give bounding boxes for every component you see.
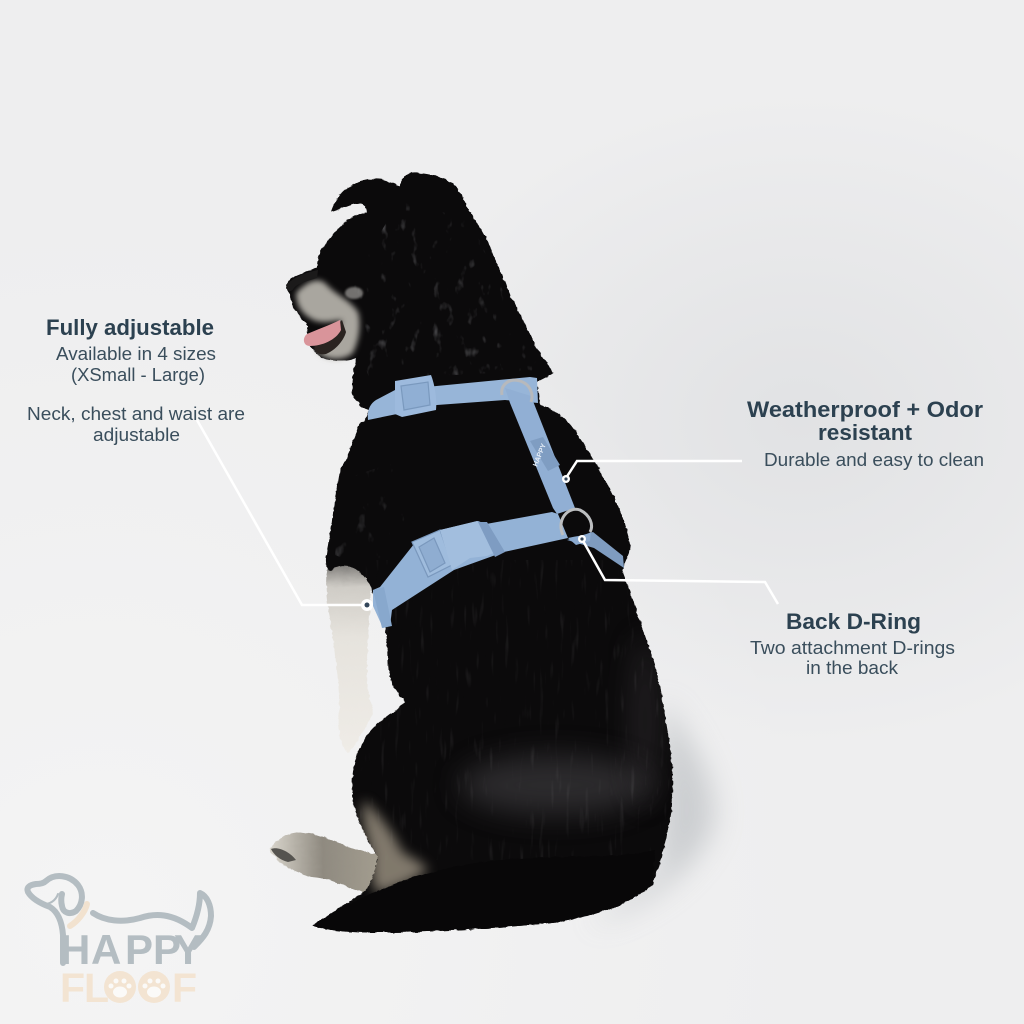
cheek white patch: [345, 287, 363, 299]
logo paw 2: [138, 971, 170, 1003]
logo FLOOF wordmark: FLOOF: [60, 965, 197, 1011]
dog silhouette: [287, 173, 673, 933]
plastic buckle: [440, 521, 500, 570]
extended paw and leg: [270, 832, 420, 893]
logo dog outline: [27, 876, 211, 963]
text: back d-ring: Two attachment D-rings: [750, 638, 955, 658]
callout line: fully adjustable: [197, 420, 373, 611]
text: weatherproof: resistant: [818, 420, 913, 445]
paw pads: [271, 848, 296, 862]
label text: HAPPY: [532, 442, 548, 468]
callout line: back d-ring: [578, 535, 778, 604]
back strap: [505, 388, 575, 514]
muzzle: [296, 280, 360, 359]
logo: happy floof: [27, 876, 211, 1011]
callout line: weatherproof: [562, 461, 742, 483]
tail: [313, 850, 655, 933]
strap end: [373, 587, 392, 628]
harness: [368, 375, 624, 628]
text: fully adjustable: (XSmall - Large): [71, 365, 205, 385]
text: fully adjustable: [27, 315, 245, 445]
text: back d-ring: Back D-Ring: [786, 609, 921, 634]
collar strap: [368, 377, 538, 420]
text: fully adjustable: adjustable: [93, 425, 180, 445]
fur streak texture: rump: [360, 560, 670, 860]
text: weatherproof: Durable and easy to clean: [764, 450, 984, 470]
text: weatherproof: Weatherproof + Odor: [747, 397, 983, 422]
text: fully adjustable: Neck, chest and waist are: [27, 404, 245, 424]
logo collar: [70, 904, 87, 926]
label tag: [530, 437, 560, 471]
text: back d-ring: in the back: [806, 658, 899, 678]
text: weatherproof: [747, 397, 984, 470]
lower D-ring: [561, 509, 592, 535]
chest slider: [412, 530, 452, 577]
text: back d-ring: [750, 609, 955, 678]
collar slider: [395, 375, 436, 417]
floor shadow: [590, 700, 714, 925]
rump fur sheen: [363, 635, 659, 893]
text: fully adjustable: Available in 4 sizes: [56, 344, 216, 364]
fur streak texture: head and neck: [340, 200, 540, 380]
logo paw 1: [104, 971, 136, 1003]
nose and snout top: [286, 270, 318, 291]
front arm: [326, 560, 374, 753]
mouth and tongue: [304, 320, 346, 354]
text: fully adjustable: Fully adjustable: [46, 315, 214, 340]
fur streak texture: shoulder: [335, 460, 405, 570]
dog photo illustration: [270, 173, 673, 933]
chest strap: [373, 512, 568, 628]
right rear strap: [567, 532, 624, 568]
infographic: [24, 172, 983, 1003]
upper D-ring: [502, 380, 532, 402]
logo HAPPY wordmark: HAPPY: [60, 926, 202, 973]
